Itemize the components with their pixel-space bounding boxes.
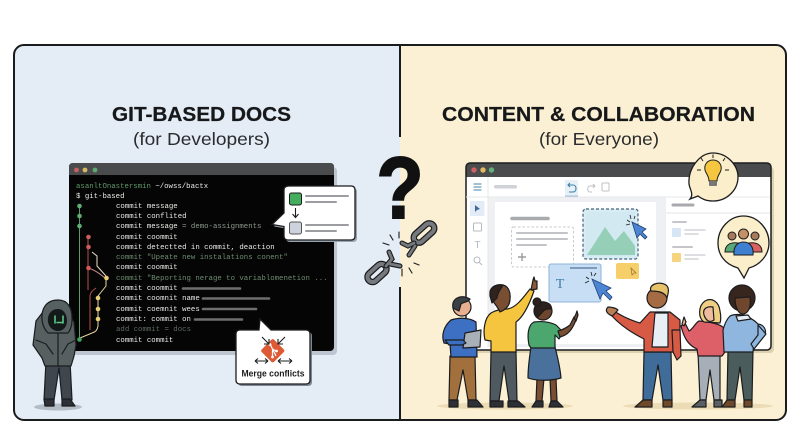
terminal text <box>76 183 328 345</box>
placeholder log bars <box>183 288 269 320</box>
terminal text: commit coommit <box>116 234 178 242</box>
terminal text: commit coemnit wees <box>116 306 200 314</box>
callout: commit diagram <box>272 186 357 242</box>
terminal window <box>69 163 337 355</box>
terminal text: commit message = demo-assignments <box>116 223 261 231</box>
conflict arrows <box>255 337 292 364</box>
ground shadows <box>437 402 773 410</box>
left tool rail: T <box>474 240 481 251</box>
person: man in yellow sweater pointing <box>484 277 537 407</box>
hoodie body <box>33 308 76 366</box>
person: man with tablet <box>443 297 483 407</box>
chain right half <box>402 221 436 255</box>
icon: broken chain <box>365 221 436 284</box>
terminal text: commit message <box>116 203 178 211</box>
eyes <box>55 316 63 323</box>
text block: T <box>556 277 565 292</box>
terminal text: commit conflited <box>116 213 187 221</box>
yellow note <box>616 263 639 279</box>
content block with placeholder <box>512 218 574 267</box>
terminal text: commit coommit <box>116 264 178 272</box>
window buttons <box>471 167 494 173</box>
terminal text: commit "Beporting nerage to variablomenetion ... <box>116 275 328 283</box>
terminal text: commit coommit <box>116 285 178 293</box>
terminal text: add commit = docs <box>116 326 191 334</box>
terminal text: commit "Upeate new instalations conent" <box>116 254 288 262</box>
label: Merge conflicts <box>242 368 305 378</box>
icon: blue cursor on text <box>592 279 612 300</box>
panel: content and collaboration background <box>400 45 786 420</box>
terminal text: commit commit <box>116 337 173 345</box>
illustration: hooded developer <box>33 300 82 410</box>
icon: blue cursor on image <box>626 215 647 239</box>
terminal text: asanltOnastersmin ~/owss/bactx <box>76 183 209 191</box>
hood <box>42 300 72 333</box>
break sparks <box>383 232 419 276</box>
face <box>48 309 67 331</box>
heading: content and collaboration: (for Everyone) <box>539 129 659 149</box>
heading: git-based docs <box>112 104 291 149</box>
panel: git-based docs background <box>14 45 400 420</box>
heading: git-based docs: (for Developers) <box>133 129 270 149</box>
git graph <box>77 204 109 342</box>
legs <box>44 361 72 400</box>
green commit square <box>290 193 302 205</box>
chain left half <box>365 252 400 284</box>
right properties panel <box>666 205 770 262</box>
callout: merge conflicts <box>236 319 312 386</box>
shoes <box>44 399 75 406</box>
person: woman in coral sweater <box>681 300 725 407</box>
terminal text: commit detectted in commit, deaction <box>116 244 275 252</box>
bubble: light bulb idea <box>689 153 738 201</box>
text block <box>549 264 601 302</box>
centre divider <box>399 45 401 420</box>
person: man in red shirt <box>606 283 681 407</box>
left tool rail <box>470 184 484 265</box>
bubble: team <box>718 216 769 278</box>
arrow down <box>292 208 298 218</box>
icon: git merge diamond <box>260 338 285 363</box>
image block with mountains <box>583 209 638 259</box>
terminal text: commit: commit on <box>116 316 191 324</box>
icon: question mark: ? <box>376 140 424 237</box>
person: man in blue shirt <box>722 285 766 407</box>
heading: git-based docs: GIT-BASED DOCS <box>112 104 291 126</box>
canvas area <box>488 197 666 347</box>
terminal text: commit coomnit name <box>116 295 200 303</box>
window buttons <box>74 168 97 172</box>
person: woman in green top <box>528 298 578 407</box>
editor window <box>466 163 774 353</box>
terminal text: $ git-based <box>76 193 124 201</box>
heading: content and collaboration <box>442 104 755 149</box>
toolbar <box>466 177 770 347</box>
heading: content and collaboration: CONTENT & COLLABORATION <box>442 104 755 126</box>
grey commit square <box>290 222 302 234</box>
